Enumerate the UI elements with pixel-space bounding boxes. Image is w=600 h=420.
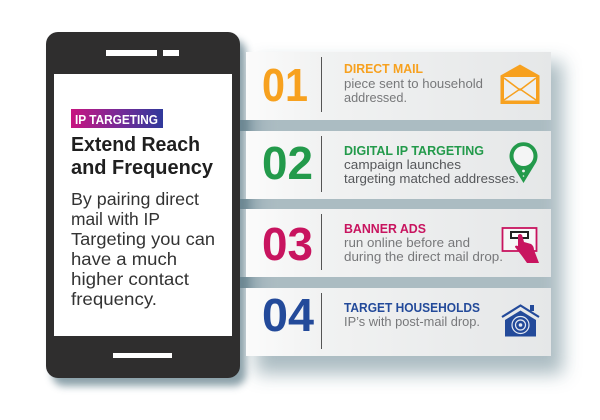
badge: ip targeting: IP TARGETING [75, 112, 158, 127]
description: banner ads: during the direct mail drop. [344, 249, 503, 264]
home bar [113, 353, 172, 358]
phone [46, 32, 240, 378]
panel: step 4 target households [246, 288, 551, 356]
card shadows [240, 62, 563, 374]
description: digital ip targeting: targeting matched addresses. [344, 171, 519, 186]
body text: By pairing direct [71, 189, 199, 209]
description: banner ads: run online before and [344, 235, 470, 250]
heading: digital ip targeting: DIGITAL IP TARGETING [344, 143, 484, 158]
panel: step 3 banner ads [246, 209, 551, 277]
panel: step 1 direct mail [246, 52, 551, 120]
heading: banner ads: BANNER ADS [344, 221, 426, 236]
phone screen [54, 74, 232, 336]
description: direct mail: addressed. [344, 90, 407, 105]
description: direct mail: piece sent to household [344, 76, 483, 91]
icon: location pin [510, 142, 538, 183]
body text: frequency. [71, 289, 157, 309]
number 03: 03 [262, 218, 313, 270]
heading: target households: TARGET HOUSEHOLDS [344, 300, 480, 315]
phone shadow [52, 40, 246, 386]
icon: hand tapping banner [502, 228, 539, 263]
description: target households: IP’s with post-mail drop. [344, 314, 480, 329]
number 02: 02 [262, 137, 313, 189]
body text: mail with IP [71, 209, 160, 229]
icon: house with target [502, 305, 539, 336]
description: digital ip targeting: campaign launches [344, 157, 462, 172]
heading: direct mail: DIRECT MAIL [344, 61, 423, 76]
icon: envelope [500, 64, 540, 104]
body text: Targeting you can [71, 229, 215, 249]
body text: have a much [71, 249, 177, 269]
body text: higher contact [71, 269, 189, 289]
panel: step 2 digital ip targeting [246, 131, 551, 199]
speaker bars [106, 50, 179, 56]
number 04: 04 [262, 289, 314, 341]
heading: extend reach and frequency: Extend Reach [71, 134, 200, 156]
heading: extend reach and frequency: and Frequency [71, 157, 214, 179]
number 01: 01 [262, 59, 308, 111]
